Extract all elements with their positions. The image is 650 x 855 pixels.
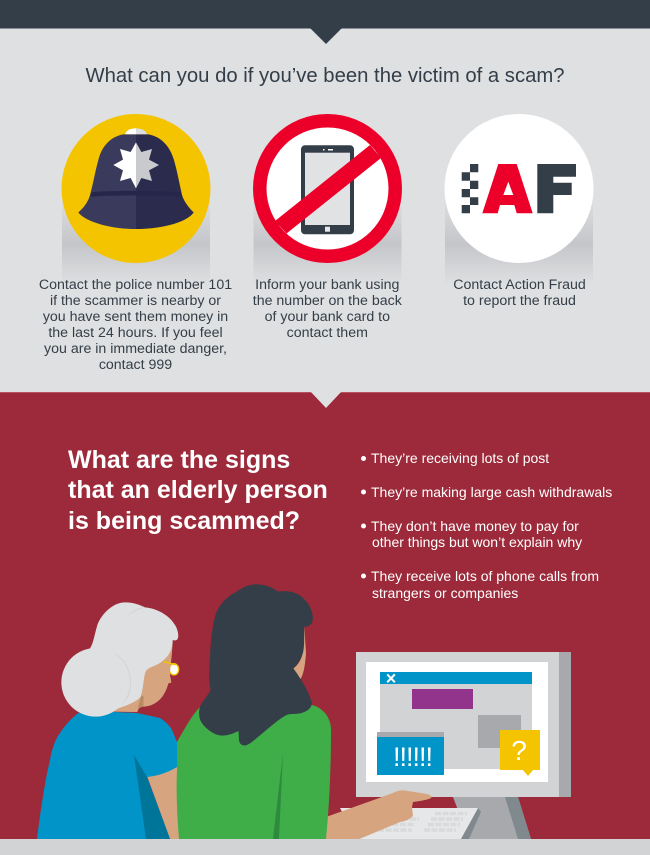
question mark speech bubble: ? bbox=[511, 735, 527, 766]
illustration: computer monitor bbox=[356, 652, 571, 839]
icon: Action Fraud logo bbox=[444, 114, 594, 285]
text: inform your bank: of your bank card to bbox=[265, 309, 390, 325]
bullet list of signs: They receive lots of phone calls from bbox=[371, 568, 599, 584]
illustration: older woman from behind bbox=[37, 602, 180, 839]
heading: signs an elderly person is being scammed: is being scammed? bbox=[68, 507, 300, 535]
icon: police helmet bbox=[62, 114, 210, 285]
text: inform your bank: Inform your bank using bbox=[255, 277, 399, 293]
text: contact the police: Contact the police number 101 bbox=[39, 277, 232, 293]
text: contact the police: contact 999 bbox=[99, 357, 172, 373]
text: inform your bank: the number on the back bbox=[253, 293, 403, 309]
heading: signs an elderly person is being scammed: that an elderly person bbox=[68, 476, 328, 504]
text: contact the police: you have sent them money in bbox=[43, 309, 228, 325]
illustration: computer monitor: × bbox=[386, 668, 396, 688]
icon: no mobile phone bbox=[253, 114, 402, 285]
popup window: !!!!!! bbox=[393, 742, 432, 772]
top banner bbox=[0, 0, 650, 44]
text: contact the police: if the scammer is nearby or bbox=[50, 293, 221, 309]
bullet list of signs: They’re making large cash withdrawals bbox=[371, 484, 612, 500]
heading: what can you do: What can you do if you’ve been the victim of a scam? bbox=[85, 65, 565, 87]
heading: signs an elderly person is being scammed: What are the signs bbox=[68, 446, 290, 474]
text: contact the police: the last 24 hours. If you feel bbox=[48, 325, 223, 341]
glasses lens bbox=[169, 664, 179, 675]
bullet list of signs: They’re receiving lots of post bbox=[371, 450, 549, 466]
illustration: keyboard bbox=[340, 808, 481, 839]
bullet list of signs: strangers or companies bbox=[372, 585, 518, 601]
text: contact action fraud: Contact Action Fraud bbox=[453, 277, 586, 293]
text: contact action fraud: to report the fraud bbox=[463, 293, 576, 309]
question mark speech bubble bbox=[500, 730, 540, 776]
panel: signs of scam background bbox=[0, 391, 650, 839]
bottom band bbox=[0, 839, 650, 855]
illustration: pointing hand bbox=[326, 790, 432, 840]
bullet list of signs: They don’t have money to pay for bbox=[371, 518, 579, 534]
text: contact the police: you are in immediate danger, bbox=[44, 341, 227, 357]
illustration: younger woman from behind bbox=[177, 584, 331, 839]
popup window bbox=[377, 732, 444, 775]
text: inform your bank: contact them bbox=[287, 325, 368, 341]
bullet list of signs: other things but won’t explain why bbox=[372, 534, 582, 550]
bullet list of signs bbox=[361, 450, 612, 601]
